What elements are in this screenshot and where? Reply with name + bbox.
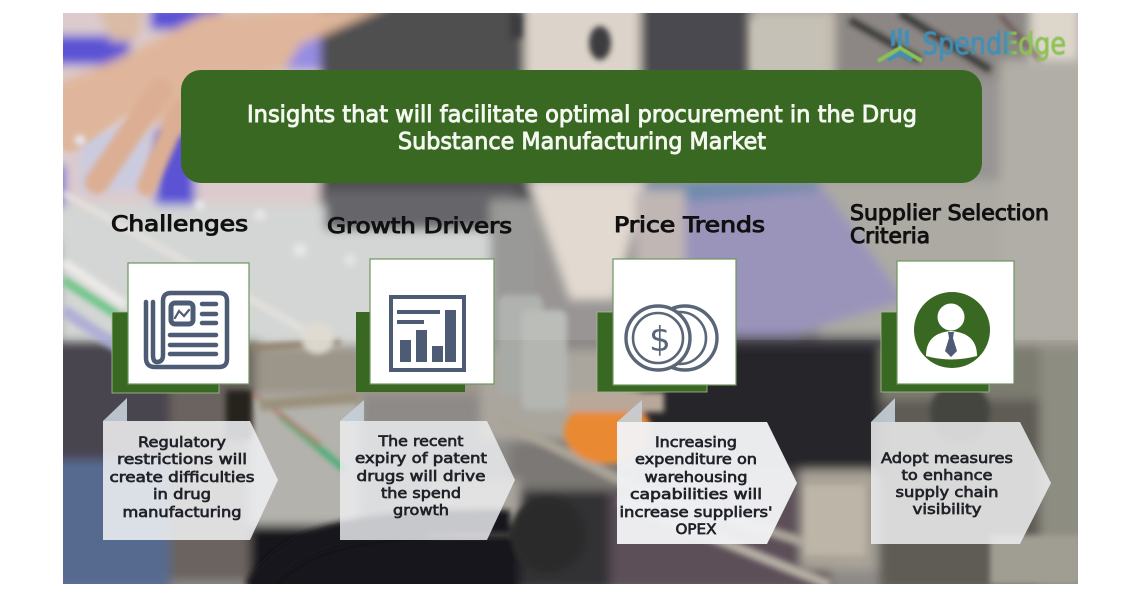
- callout text: in drug: [153, 487, 211, 503]
- callout text: [620, 435, 772, 538]
- upper zones: [63, 13, 329, 240]
- jars: [498, 295, 543, 395]
- card: [128, 263, 249, 384]
- callout text: [881, 451, 1013, 518]
- callout text: capabilities will: [630, 487, 762, 503]
- callout text: [110, 435, 254, 521]
- sparkles: [75, 135, 85, 145]
- card: [613, 259, 736, 385]
- callout text: expiry of patent: [355, 451, 487, 467]
- laptop: [681, 186, 896, 342]
- callout text: manufacturing: [122, 505, 242, 521]
- conveyor rails: [63, 280, 125, 320]
- callout: [871, 422, 1051, 544]
- icon: dollar sign: $: [649, 320, 671, 360]
- callout text: restrictions will: [117, 452, 247, 468]
- heading: supplier selection criteria: [850, 201, 1049, 248]
- lower zones: [40, 340, 210, 460]
- panel: challenges: [103, 212, 278, 540]
- heading: supplier selection criteria: Criteria: [850, 224, 930, 248]
- callout tab: [871, 398, 895, 422]
- heading: supplier selection criteria: Supplier Selection: [850, 201, 1049, 225]
- title text: [247, 102, 917, 155]
- card: [370, 259, 494, 384]
- callout text: expenditure on: [635, 452, 757, 468]
- card: [897, 261, 1014, 384]
- heading: growth drivers: Growth Drivers: [327, 214, 512, 238]
- title banner: [181, 70, 982, 183]
- icon: report chart: [389, 295, 466, 372]
- callout tab: [340, 400, 364, 421]
- callout text: supply chain: [896, 485, 998, 501]
- callout: [340, 421, 515, 540]
- bottles: [60, 205, 510, 345]
- callout text: increase suppliers': [620, 505, 772, 521]
- top machine details: [589, 26, 611, 60]
- callout text: growth: [393, 503, 449, 519]
- callout text: OPEX: [676, 522, 717, 538]
- cone: [528, 180, 645, 300]
- callout text: The recent: [377, 434, 464, 450]
- black cable: [255, 522, 510, 590]
- callout text: Adopt measures: [881, 451, 1013, 467]
- fingers: [70, 85, 135, 135]
- panel: price trends: [597, 213, 797, 544]
- heading: price trends: Price Trends: [614, 213, 765, 237]
- card backing: [881, 312, 989, 392]
- logo: SpendEdge: [878, 27, 1066, 62]
- callout text: the spend: [381, 486, 461, 502]
- icon: coins: [626, 306, 717, 370]
- callout tab: [103, 398, 127, 421]
- callout text: create difficulties: [110, 470, 254, 486]
- heading: challenges: Challenges: [111, 212, 248, 236]
- callout: [103, 421, 278, 540]
- callout text: Regulatory: [138, 435, 226, 451]
- icon: logo mark: [878, 28, 922, 61]
- callout text: visibility: [912, 502, 982, 518]
- icon: person: [914, 292, 990, 368]
- orange tablets: [564, 400, 652, 464]
- callout tab: [617, 400, 642, 422]
- callout: [617, 422, 797, 544]
- logo: SpendEdge: SpendEdge: [922, 27, 1066, 62]
- panel: supplier selection criteria: [850, 201, 1051, 544]
- callout text: warehousing: [644, 470, 748, 486]
- panel: growth drivers: [327, 214, 515, 540]
- card backing: [356, 312, 465, 392]
- callout text: [355, 434, 487, 519]
- callout text: drugs will drive: [356, 469, 486, 485]
- title text: Substance Manufacturing Market: [398, 129, 766, 155]
- title text: Insights that will facilitate optimal procurement in the Drug: [247, 102, 917, 128]
- icon: newspaper: [146, 293, 227, 367]
- hand: [63, 13, 390, 127]
- card backing: [112, 312, 219, 393]
- card backing: [597, 312, 707, 392]
- callout text: to enhance: [902, 468, 993, 484]
- callout text: Increasing: [655, 435, 737, 451]
